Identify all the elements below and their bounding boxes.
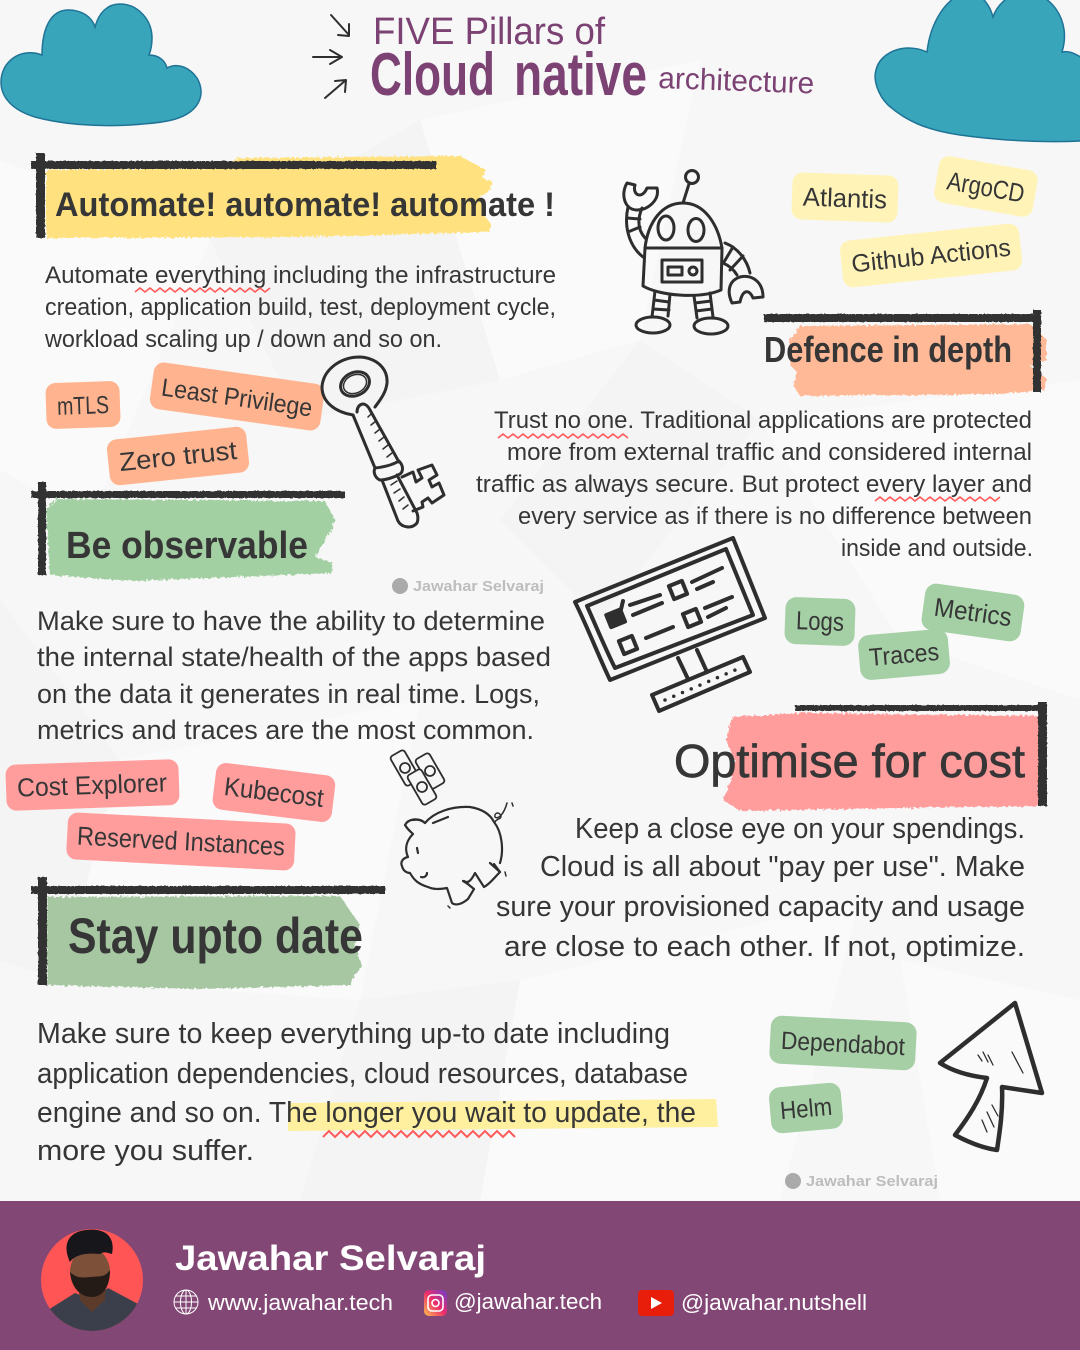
watermark: Jawahar Selvaraj	[413, 578, 544, 595]
text: observable body: metrics and traces are the most common.	[37, 715, 534, 745]
chip: Github Actions: Github Actions	[850, 234, 1012, 278]
text: optimise body: Cloud is all about "pay per use". Make	[540, 851, 1025, 883]
panel: stay upto date heading: Stay upto date	[68, 908, 363, 964]
icon: key	[322, 357, 444, 527]
chip: Cost Explorer	[5, 759, 180, 811]
chip: Traces: Traces	[868, 638, 940, 672]
text: optimise body: are close to each other. If not, optimize.	[504, 931, 1025, 963]
chip: Dependabot	[769, 1015, 917, 1071]
author name: Jawahar Selvaraj	[175, 1239, 486, 1278]
footer	[0, 1201, 1080, 1350]
chip: Kubecost: Kubecost	[223, 771, 326, 813]
icon: instagram	[424, 1290, 447, 1316]
panel: be observable heading	[31, 482, 345, 581]
title: FIVE Pillars of	[373, 11, 605, 53]
chip: mTLS	[45, 381, 121, 429]
website link: www.jawahar.tech	[207, 1290, 393, 1315]
title: architecture	[658, 62, 815, 100]
text: optimise body: sure your provisioned capacity and usage	[496, 891, 1025, 923]
chip: Cost Explorer: Cost Explorer	[17, 767, 168, 803]
chip: Atlantis	[791, 172, 899, 223]
chip: Kubecost	[212, 762, 336, 823]
instagram handle: @jawahar.tech	[454, 1289, 602, 1314]
panel: be observable heading: Be observable	[66, 525, 308, 567]
chip: Github Actions	[839, 223, 1023, 288]
chip: Zero trust: Zero trust	[118, 435, 239, 477]
text: optimise body	[496, 813, 1025, 963]
chip: Metrics: Metrics	[932, 592, 1014, 632]
text: defence body: Trust no one. Traditional applications are protected	[494, 407, 1032, 434]
chip: Zero trust	[106, 426, 250, 486]
text: defence body: every service as if there is no difference between	[518, 503, 1032, 530]
icon: monitor checklist	[575, 538, 765, 711]
chip: Logs	[784, 597, 856, 646]
chip: mTLS: mTLS	[57, 391, 110, 421]
watermark: Jawahar Selvaraj	[806, 1173, 938, 1190]
text: automate body: workload scaling up / down and so on.	[44, 326, 442, 353]
chip: Helm: Helm	[779, 1093, 833, 1125]
title: Cloud	[370, 41, 495, 108]
text: optimise body: Keep a close eye on your spendings.	[575, 813, 1025, 845]
text: observable body: on the data it generates in real time. Logs,	[37, 679, 540, 709]
chip: Reserved Instances	[66, 812, 296, 871]
icon: right cloud	[875, 0, 1080, 142]
panel: automate heading: Automate! automate! automate !	[55, 186, 555, 224]
youtube handle: @jawahar.nutshell	[681, 1290, 867, 1315]
icon: title arrows	[313, 15, 349, 98]
text: stay upto date body: Make sure to keep everything up-to date including	[37, 1018, 670, 1050]
chip: Metrics	[920, 582, 1026, 643]
text: stay upto date body: engine and so on. The longer you wait to update, the	[37, 1097, 696, 1129]
panel: optimise for cost heading	[674, 702, 1047, 811]
icon: piggy bank	[401, 803, 513, 908]
icon: big up arrow	[940, 1003, 1042, 1150]
text: automate body: creation, application build, test, deployment cycle,	[45, 294, 556, 321]
text: defence body: traffic as always secure. But protect every layer and	[476, 471, 1032, 498]
title	[370, 11, 815, 108]
text: stay upto date body	[37, 1018, 718, 1167]
text: defence body	[476, 407, 1033, 562]
panel: automate heading	[31, 153, 555, 238]
panel: defence in depth heading: Defence in depth	[764, 329, 1012, 370]
text: observable body: the internal state/health of the apps based	[37, 642, 551, 672]
panel: defence in depth heading	[764, 310, 1047, 396]
avatar	[41, 1229, 143, 1331]
chip: Reserved Instances: Reserved Instances	[76, 821, 286, 861]
icon: robot	[624, 170, 763, 334]
text: defence body: more from external traffic and considered internal	[507, 439, 1032, 466]
text: observable body: Make sure to have the ability to determine	[37, 606, 545, 636]
text: stay upto date body: application dependencies, cloud resources, database	[37, 1058, 688, 1090]
chip: Logs: Logs	[795, 605, 845, 637]
chip: Traces	[857, 628, 951, 681]
chip: Dependabot: Dependabot	[780, 1027, 906, 1061]
text: defence body: inside and outside.	[841, 535, 1033, 562]
chip: Least Privilege	[149, 361, 326, 432]
text: automate body: Automate everything including the infrastructure	[45, 262, 556, 289]
text: observable body	[37, 606, 551, 745]
panel: stay upto date heading	[31, 877, 385, 989]
chip: Least Privilege: Least Privilege	[160, 374, 314, 422]
panel: optimise for cost heading: Optimise for cost	[674, 735, 1025, 787]
chip: Atlantis: Atlantis	[802, 182, 887, 214]
icon: money notes	[390, 749, 445, 806]
icon: youtube	[638, 1290, 674, 1316]
title: native	[514, 41, 647, 108]
chip: ArgoCD: ArgoCD	[945, 165, 1027, 209]
text: automate body	[44, 262, 556, 353]
icon: globe	[174, 1290, 198, 1314]
chip: ArgoCD	[933, 155, 1039, 218]
chip: Helm	[768, 1082, 844, 1134]
text: stay upto date body: more you suffer.	[37, 1135, 254, 1167]
icon: left cloud	[1, 4, 201, 126]
